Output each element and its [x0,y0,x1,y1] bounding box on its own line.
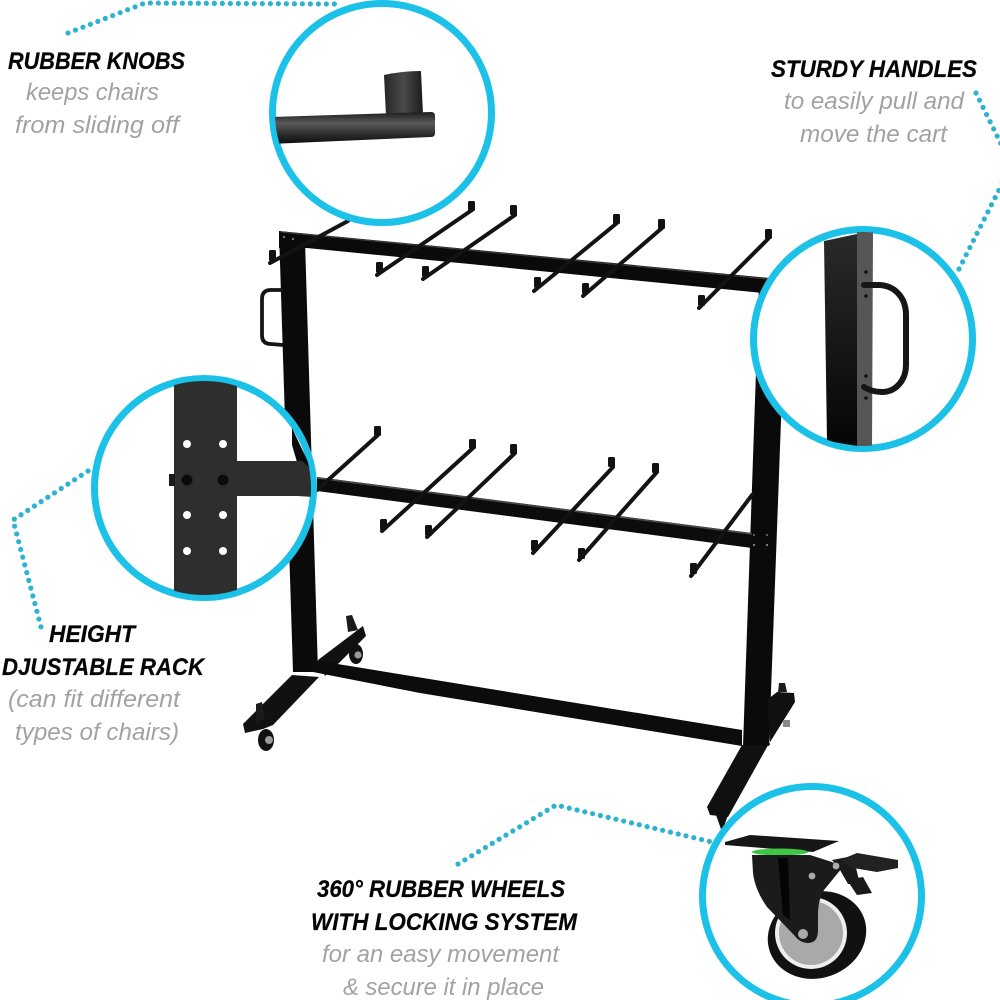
label: rubber knobs: keeps chairs [26,79,159,106]
top plate [725,835,839,852]
label: sturdy handles: move the cart [800,121,948,148]
dotted leader: height adjustable rack [13,471,88,627]
callout circle: rubber knob detail [270,4,492,222]
right foot [707,692,795,817]
left rear wheel [349,644,363,664]
label: sturdy handles: STURDY HANDLES [771,56,977,83]
icon: wedge behind arm [292,428,310,468]
left front foot [243,675,319,733]
right wheel [716,815,728,832]
middle cross bar [317,477,752,548]
label: rubber wheels: for an easy movement [322,941,560,968]
bottom rail [313,660,742,746]
label: height adjustable rack: DJUSTABLE RACK [2,654,206,681]
callout circle: sturdy handle detail [754,230,972,450]
wheel rim [775,897,847,969]
icon: bracket arm [237,461,312,497]
dotted leader: rubber knobs [68,3,337,33]
fork [752,855,842,943]
icon: bolt nub [169,474,175,486]
callout circle: adjustable rack detail [94,378,314,598]
label: height adjustable rack: (can fit different [8,686,181,713]
label: height adjustable rack: types of chairs) [15,719,179,746]
label: height adjustable rack: HEIGHT [49,621,137,648]
dotted leader: wheels [458,805,712,864]
label: sturdy handles: to easily pull and [784,88,965,115]
icon: d-shaped handle [864,285,906,392]
icon: post plate [174,378,237,598]
icon: knob cylinder [384,71,423,116]
label: sturdy handles [771,56,977,148]
label: rubber wheels [311,876,578,1000]
foot brackets [256,702,265,722]
dotted leader: sturdy handles upper [976,93,1000,150]
post holes [283,236,768,546]
green ring [752,848,808,856]
side handle [262,290,283,345]
icon: post side face [857,230,873,450]
wheel tyre [755,877,879,993]
icon: caster wheel [725,835,898,993]
icon: hook tube [270,112,435,144]
right upright post [743,285,786,746]
label: rubber wheels: 360° RUBBER WHEELS [317,876,565,903]
brake lever [847,877,872,895]
chair cart rack [243,201,795,832]
bolts [798,863,839,939]
left rear foot [318,626,366,676]
top cross bar [279,231,770,293]
label: rubber knobs: from sliding off [15,112,181,139]
label: rubber knobs: RUBBER KNOBS [8,48,185,75]
label: rubber knobs [8,48,185,139]
label: rubber wheels: WITH LOCKING SYSTEM [311,909,578,936]
foot bolt [783,720,790,727]
dotted leader: sturdy handles lower [959,180,1000,269]
icon: white holes [183,440,227,555]
icon: post holes [864,270,868,400]
brake pedal [840,853,898,872]
callout circle: caster wheel detail [702,786,922,1000]
top hooks [269,201,772,308]
label: height adjustable rack [2,621,206,746]
icon: black bolts [182,474,228,486]
lower hooks [317,426,752,576]
left front wheel [258,729,274,751]
brake link [832,856,860,884]
icon: post dark face [824,234,857,446]
left upright post [279,231,318,672]
